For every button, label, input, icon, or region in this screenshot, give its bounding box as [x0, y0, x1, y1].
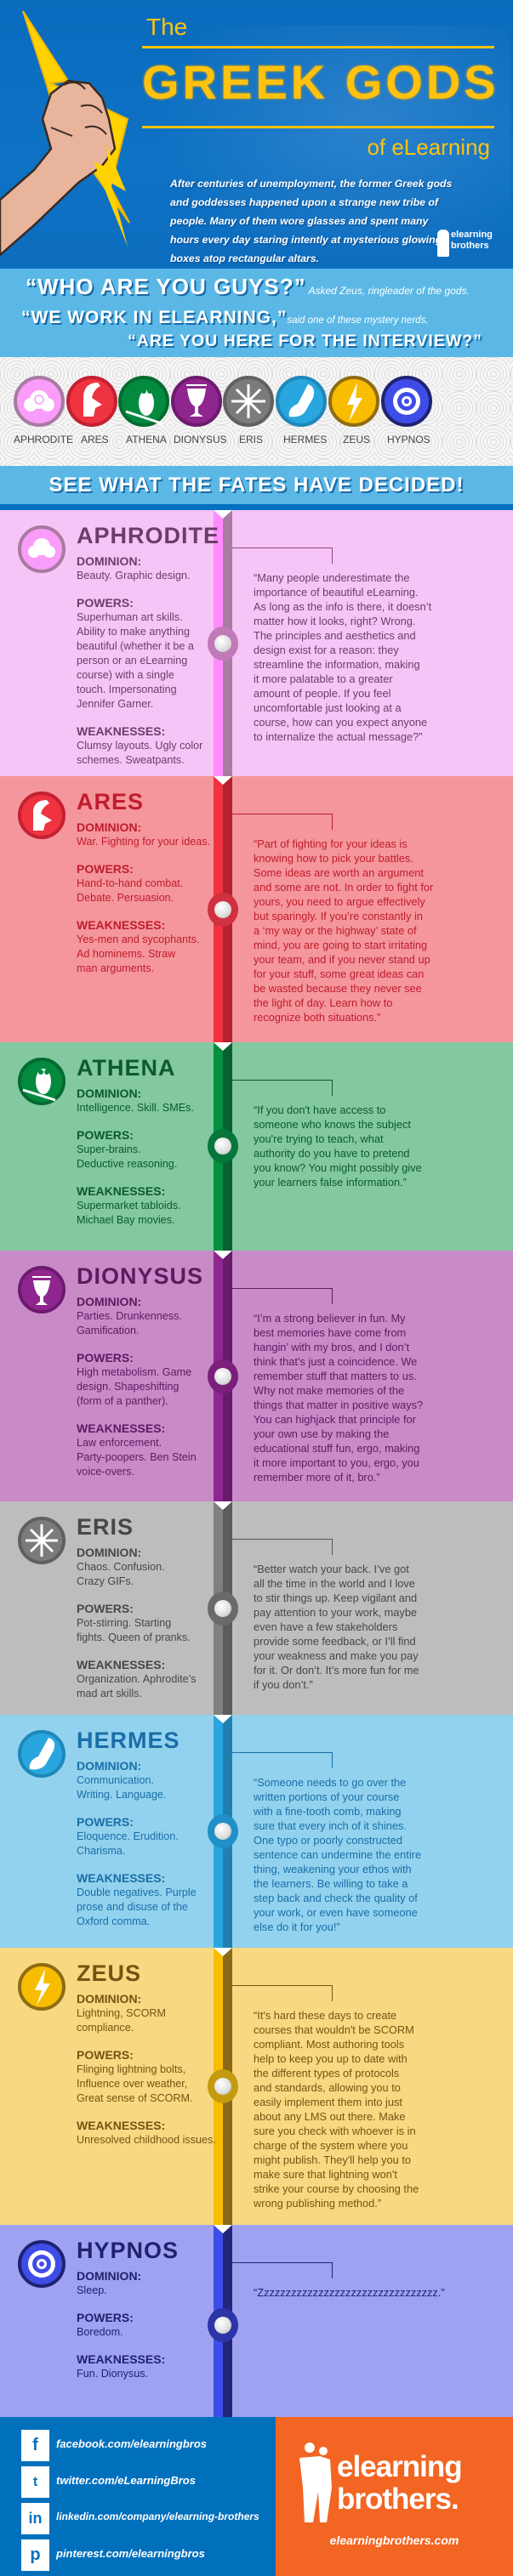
panel: hypnos: DOMINION:: [77, 2269, 141, 2283]
footer: logo: [276, 2417, 513, 2576]
intro paragraph: and goddesses happened upon a strange new tribe of: [170, 196, 438, 208]
panel: zeus: Influence over weather,: [77, 2078, 187, 2090]
panel: dionysus: You can highjack that principle for: [254, 1413, 416, 1426]
panel: hermes: Oxford comma.: [77, 1915, 150, 1927]
panel: aphrodite: matter how it looks, right? Wrong.: [254, 615, 415, 627]
panel: eris: pay attention to your work, maybe: [254, 1606, 417, 1619]
icon labels: ARES: [81, 434, 109, 445]
panel: eris: all the time in the world and I love: [254, 1577, 415, 1590]
panel: ares: Debate. Persuasion. Yes-men and sycophants.: [77, 892, 199, 945]
panel: aphrodite: design exist for a reason: they: [254, 644, 399, 656]
subtitle: of eLearning: of eLearning: [367, 134, 490, 160]
panel: hermes: else do it for you!”: [254, 1921, 340, 1933]
panel: athena: POWERS:: [77, 1128, 134, 1142]
panel: dionysus: Why not make memories of the: [254, 1384, 404, 1397]
panel: hermes: POWERS:: [77, 1815, 134, 1829]
logo text: elearning: [337, 2450, 462, 2483]
icon: lightning: [18, 1963, 66, 2011]
panel: ares: a ‘my way or the highway’ state of: [254, 924, 417, 937]
panel: aphrodite: streamline the information, making: [254, 658, 420, 671]
panel: zeus: and standards, allowing you to: [254, 2081, 401, 2094]
panel: athena: your learners false information.”: [254, 1176, 407, 1189]
panel: hermes: HERMES: [77, 1728, 180, 1753]
panel: dionysus: it more important to you, ergo, you: [254, 1456, 419, 1469]
icon row: [14, 376, 432, 427]
panel: hermes: the learners. Be willing to take a: [254, 1877, 408, 1890]
icon labels: ZEUS: [343, 434, 370, 445]
panel: athena: authority do you have to pretend: [254, 1147, 410, 1160]
panel: aphrodite: amount of people. If you feel: [254, 687, 391, 700]
footer: social links: linkedin.com/company/elearning-brothers: [56, 2511, 259, 2522]
panel: zeus: might publish. They'll help you to: [254, 2153, 411, 2166]
panel: eris: even have a few stakeholders: [254, 1620, 397, 1633]
panel: zeus: the different types of protocols: [254, 2067, 399, 2080]
footer: social links: twitter.com/eLearningBros: [56, 2474, 196, 2487]
line 2: “WE WORK IN ELEARNING,”said one of these mystery nerds,: [21, 308, 429, 327]
panel: dionysus: POWERS:: [77, 1351, 134, 1365]
panel: aphrodite: DOMINION:: [77, 554, 141, 568]
panel: zeus: charge of the system where you: [254, 2139, 408, 2152]
panel: ares: recognize both situations.”: [254, 1011, 380, 1024]
panel: hermes: sure that every inch of it shines.: [254, 1819, 407, 1832]
icon: pinterest: [21, 2539, 49, 2571]
panel: eris: provide some feedback, or I’ll find: [254, 1635, 416, 1648]
icon: chaos star: [18, 1517, 66, 1564]
panel: dionysus: your own use by making the: [254, 1427, 389, 1440]
panel: dionysus: (form of a panther). Law enforcement.: [77, 1395, 168, 1449]
panel: zeus: Great sense of SCORM. Unresolved childhood issues.: [77, 2092, 216, 2146]
panel: athena: you're trying to teach, what: [254, 1132, 384, 1145]
panel: eris: Chaos. Confusion.: [77, 1561, 165, 1573]
line 1: “WHO ARE YOU GUYS?” Asked Zeus, ringleader of the gods.: [26, 274, 470, 299]
panel: zeus: POWERS:: [77, 2048, 134, 2062]
panel: zeus: about any LMS out there. Make: [254, 2110, 406, 2123]
panel: ares: the light of day. Learn how to: [254, 996, 392, 1009]
line 3: “ARE YOU HERE FOR THE INTERVIEW?”: [128, 332, 482, 350]
panel: hermes: Communication.: [77, 1774, 154, 1786]
panel: eris: [0, 1501, 513, 1715]
panel: aphrodite: The principles and aesthetics and: [254, 629, 416, 642]
panel: eris: your weakness and make you pay: [254, 1649, 418, 1662]
panel: athena: Michael Bay movies.: [77, 1214, 174, 1226]
panel: aphrodite: course, how can you expect anyone: [254, 716, 427, 729]
icon: twitter: [21, 2466, 49, 2498]
icon: twitter: t: [33, 2475, 37, 2489]
panel: aphrodite: course) with a single: [77, 669, 174, 681]
panel: dionysus: Parties. Drunkenness.: [77, 1310, 182, 1322]
header panel: [0, 0, 513, 269]
panel: eris: Crazy GIFs. Pot-stirring. Starting: [77, 1575, 171, 1629]
panel: ares: War. Fighting for your ideas. Hand-to-hand combat.: [77, 836, 210, 889]
panel: dionysus: DIONYSUS: [77, 1263, 203, 1289]
panel: hermes: thing, weakening your ethos with: [254, 1863, 412, 1875]
panel: zeus: strike your course by choosing the: [254, 2182, 419, 2195]
panel: aphrodite: uncomfortable just looking at a: [254, 701, 402, 714]
icon: linkedin: in: [29, 2510, 43, 2527]
panel: dionysus: best memories have come from: [254, 1326, 406, 1339]
panel: aphrodite: POWERS:: [77, 596, 134, 610]
panel: dionysus: remember stuff that matters to us.: [254, 1370, 417, 1382]
panel: hermes: prose and disuse of the: [77, 1901, 188, 1913]
panel: aphrodite: person or an eLearning: [77, 655, 187, 667]
logo text: brothers.: [337, 2482, 459, 2516]
panel: eris: ERIS: [77, 1514, 134, 1540]
panel: athena: you know? You might possibly give: [254, 1161, 422, 1174]
panel: ares: knowing how to pick your battles.: [254, 852, 413, 865]
panel: ares: mind, you are going to start irritating: [254, 939, 427, 951]
icon labels: [14, 434, 430, 445]
panel: ares: WEAKNESSES:: [77, 918, 165, 932]
panel: ares: yours, you need to argue effectively: [254, 895, 425, 908]
panel: athena: Deductive reasoning. Supermarket tabloids.: [77, 1158, 181, 1211]
panel: eris: fights. Queen of pranks. Organization. Aphrodite’s: [77, 1631, 196, 1685]
panel: hypnos: POWERS:: [77, 2311, 134, 2324]
panel: aphrodite: importance of beautiful eLearning.: [254, 586, 419, 599]
quote band: who are you guys: [0, 269, 513, 357]
panel: hypnos: [0, 2225, 513, 2417]
panel: eris: “Better watch your back. I’ve got: [254, 1563, 409, 1575]
intro paragraph: After centuries of unemployment, the former Greek gods: [170, 178, 452, 190]
panel: eris: mad art skills.: [77, 1688, 142, 1699]
panel: aphrodite: Ability to make anything: [77, 626, 190, 638]
panel: athena: DOMINION:: [77, 1087, 141, 1100]
panel: dionysus: remember more of it, bro.”: [254, 1471, 380, 1484]
panel: god icon row: [0, 357, 513, 466]
panel: hermes: Charisma. Double negatives. Purple: [77, 1845, 197, 1898]
icon: chalice: [18, 1266, 66, 1314]
panel: zeus: make sure that lightning won't: [254, 2168, 397, 2181]
intro paragraph: boxes atop rectangular altars.: [170, 252, 319, 264]
panel: ares: [0, 776, 513, 1042]
panel: ares: ARES: [77, 789, 144, 814]
panel: hypnos: HYPNOS: [77, 2238, 179, 2263]
panel: eris: if you don’t.”: [254, 1678, 313, 1691]
panel: ares: and some are not. In order to fight for: [254, 881, 433, 894]
panel: aphrodite: Jennifer Garner. Clumsy layouts. Ugly color: [77, 698, 202, 752]
footer: social links: pinterest.com/elearningbros: [56, 2547, 205, 2560]
panel: zeus: compliant. Most authoring tools: [254, 2038, 404, 2051]
icon: owl: [18, 1058, 66, 1105]
panel: hermes: [0, 1715, 513, 1948]
icon: rose: [18, 525, 66, 573]
panel: hermes: WEAKNESSES:: [77, 1871, 165, 1885]
panel: eris: POWERS:: [77, 1602, 134, 1615]
panel: ares: be wasted because they never see: [254, 982, 422, 995]
icon labels: ATHENA: [126, 434, 167, 445]
panel: zeus: sure you check with whoever is in: [254, 2125, 416, 2137]
panel: dionysus: [0, 1251, 513, 1501]
panel: eris: for it. Or don’t. It’s more fun for me: [254, 1664, 419, 1677]
panel: zeus: wrong publishing method.”: [254, 2197, 381, 2210]
panel: zeus: help to keep you up to date with: [254, 2052, 408, 2065]
panel: hermes: “Someone needs to go over the: [254, 1776, 406, 1789]
icon labels: ERIS: [239, 434, 263, 445]
panel: ares: “Part of fighting for your ideas is: [254, 837, 408, 850]
title: The: The: [146, 14, 187, 40]
panel: hermes: step back and check the quality of: [254, 1892, 418, 1904]
panel: zeus: courses that wouldn't be SCORM: [254, 2023, 414, 2036]
panel: ares: Ad hominems. Straw: [77, 948, 175, 960]
panel: aphrodite: “Many people underestimate the: [254, 571, 410, 584]
icon: helmet: [18, 792, 66, 839]
panel: hypnos: WEAKNESSES:: [77, 2352, 165, 2366]
panel: hermes: written portions of your course: [254, 1790, 399, 1803]
icon: hypnotic target: [18, 2240, 66, 2288]
icon labels: DIONYSUS: [174, 434, 227, 445]
panel: aphrodite: [0, 510, 513, 776]
panel: dionysus: Party-poopers. Ben Stein: [77, 1451, 197, 1463]
intro paragraph: people. Many of them wore glasses and spent many: [170, 215, 428, 227]
footer: social links: facebook.com/elearningbros: [56, 2437, 207, 2450]
panel: dionysus: things that matter in positive ways?: [254, 1399, 423, 1411]
panel: ares: but sparingly. If you’re constantly in: [254, 910, 423, 922]
logo: elearning brothers small: elearning: [451, 230, 493, 240]
panel: aphrodite: to internalize the actual message?”: [254, 730, 422, 743]
panel: aphrodite: it more palatable to a greater: [254, 672, 393, 685]
panel: hermes: your work, or even have someone: [254, 1906, 418, 1919]
panel: hermes: with a fine-tooth comb, making: [254, 1805, 402, 1818]
icon: fist with lightning bolt: [0, 10, 130, 257]
panel: dionysus: Gamification. High metabolism. Game: [77, 1325, 191, 1378]
heading: see what the fates have decided: [0, 466, 513, 504]
panel: eris: DOMINION:: [77, 1546, 141, 1559]
panel: ares: for your stuff, some great ideas can: [254, 967, 424, 980]
panel: zeus: ZEUS: [77, 1960, 141, 1986]
panel: dionysus: hangin’ with my bros, and I don’t: [254, 1341, 409, 1353]
panel: zeus: [0, 1948, 513, 2225]
intro paragraph: hours every day staring intently at mysterious glowing: [170, 234, 442, 246]
panel: ares: DOMINION:: [77, 820, 141, 834]
panel: hermes: sentence can undermine the entire: [254, 1848, 421, 1861]
panel: athena: WEAKNESSES:: [77, 1184, 165, 1198]
panel: dionysus: think that’s just a coincidence. We: [254, 1355, 417, 1368]
panel: eris: to stir things up. Keep vigilant and: [254, 1592, 417, 1604]
panel: aphrodite: As long as the info is there, it doesn’t: [254, 600, 431, 613]
panel: aphrodite: beautiful (whether it be a: [77, 640, 194, 652]
panel: athena: someone who knows the subject: [254, 1118, 411, 1131]
icon labels: APHRODITE: [14, 434, 73, 445]
panel: zeus: DOMINION:: [77, 1992, 141, 2006]
panel: zeus: “It's hard these days to create: [254, 2009, 396, 2022]
logo: elearning brothers small: [437, 230, 493, 257]
panel: hermes: DOMINION:: [77, 1759, 141, 1773]
panel: dionysus: design. Shapeshifting: [77, 1381, 179, 1393]
panel: eris: WEAKNESSES:: [77, 1658, 165, 1671]
logo text: [337, 2450, 462, 2516]
panel: zeus: WEAKNESSES:: [77, 2119, 165, 2132]
panel: ares: man arguments.: [77, 962, 154, 974]
panel: aphrodite: WEAKNESSES:: [77, 724, 165, 738]
decorative skyline: [153, 26, 510, 264]
panel: athena: Intelligence. Skill. SMEs. Super-brains.: [77, 1102, 194, 1155]
icon labels: HERMES: [283, 434, 327, 445]
panel: aphrodite: touch. Impersonating: [77, 684, 177, 695]
panel: hermes: Writing. Language. Eloquence. Erudition.: [77, 1789, 179, 1842]
icon labels: HYPNOS: [387, 434, 430, 445]
icon: facebook: f: [32, 2436, 38, 2454]
icon: pinterest: p: [30, 2545, 41, 2564]
panel: aphrodite: APHRODITE: [77, 523, 219, 548]
panel: hermes: One typo or poorly constructed: [254, 1834, 402, 1847]
logo: elearning brothers small: brothers: [451, 241, 489, 251]
icon: facebook: [21, 2430, 49, 2461]
panel: hypnos: Sleep. Boredom. Fun. Dionysus.: [77, 2284, 148, 2380]
panel: athena: “If you don't have access to: [254, 1104, 385, 1116]
panel: dionysus: “I’m a strong believer in fun. My: [254, 1312, 406, 1325]
panel: athena: [0, 1042, 513, 1251]
intro paragraph: [170, 178, 453, 265]
panel: hypnos: “Zzzzzzzzzzzzzzzzzzzzzzzzzzzzzzzzz.”: [254, 2286, 445, 2299]
panel: ares: Some ideas are worth an argument: [254, 866, 424, 879]
panel: athena: ATHENA: [77, 1055, 175, 1081]
panel: zeus: Lightning, SCORM: [77, 2007, 166, 2019]
panel: zeus: easily implement them into just: [254, 2096, 402, 2108]
footer: social links: [0, 2417, 276, 2576]
panel: aphrodite: schemes. Sweatpants.: [77, 754, 185, 766]
panel: dionysus: voice-overs.: [77, 1466, 134, 1478]
panel: dionysus: DOMINION:: [77, 1295, 141, 1308]
panel: dionysus: WEAKNESSES:: [77, 1421, 165, 1435]
panel: dionysus: educational stuff fun, ergo, making: [254, 1442, 419, 1455]
website: elearningbrothers.com: [330, 2533, 459, 2547]
icon: brothers silhouettes: [299, 2443, 332, 2522]
title: GREEK GODS: GREEK GODS: [142, 55, 499, 109]
panel: aphrodite: Beauty. Graphic design. Superhuman art skills.: [77, 570, 190, 623]
icon: winged sandal: [18, 1730, 66, 1778]
panel: ares: your team, and if you never stand up: [254, 953, 430, 966]
heading: see what the fates have decided: SEE WHAT THE FATES HAVE DECIDED!: [48, 474, 465, 496]
panel: ares: POWERS:: [77, 862, 134, 876]
icon: linkedin: [21, 2503, 49, 2534]
panel: zeus: compliance. Flinging lightning bolts,: [77, 2022, 185, 2075]
